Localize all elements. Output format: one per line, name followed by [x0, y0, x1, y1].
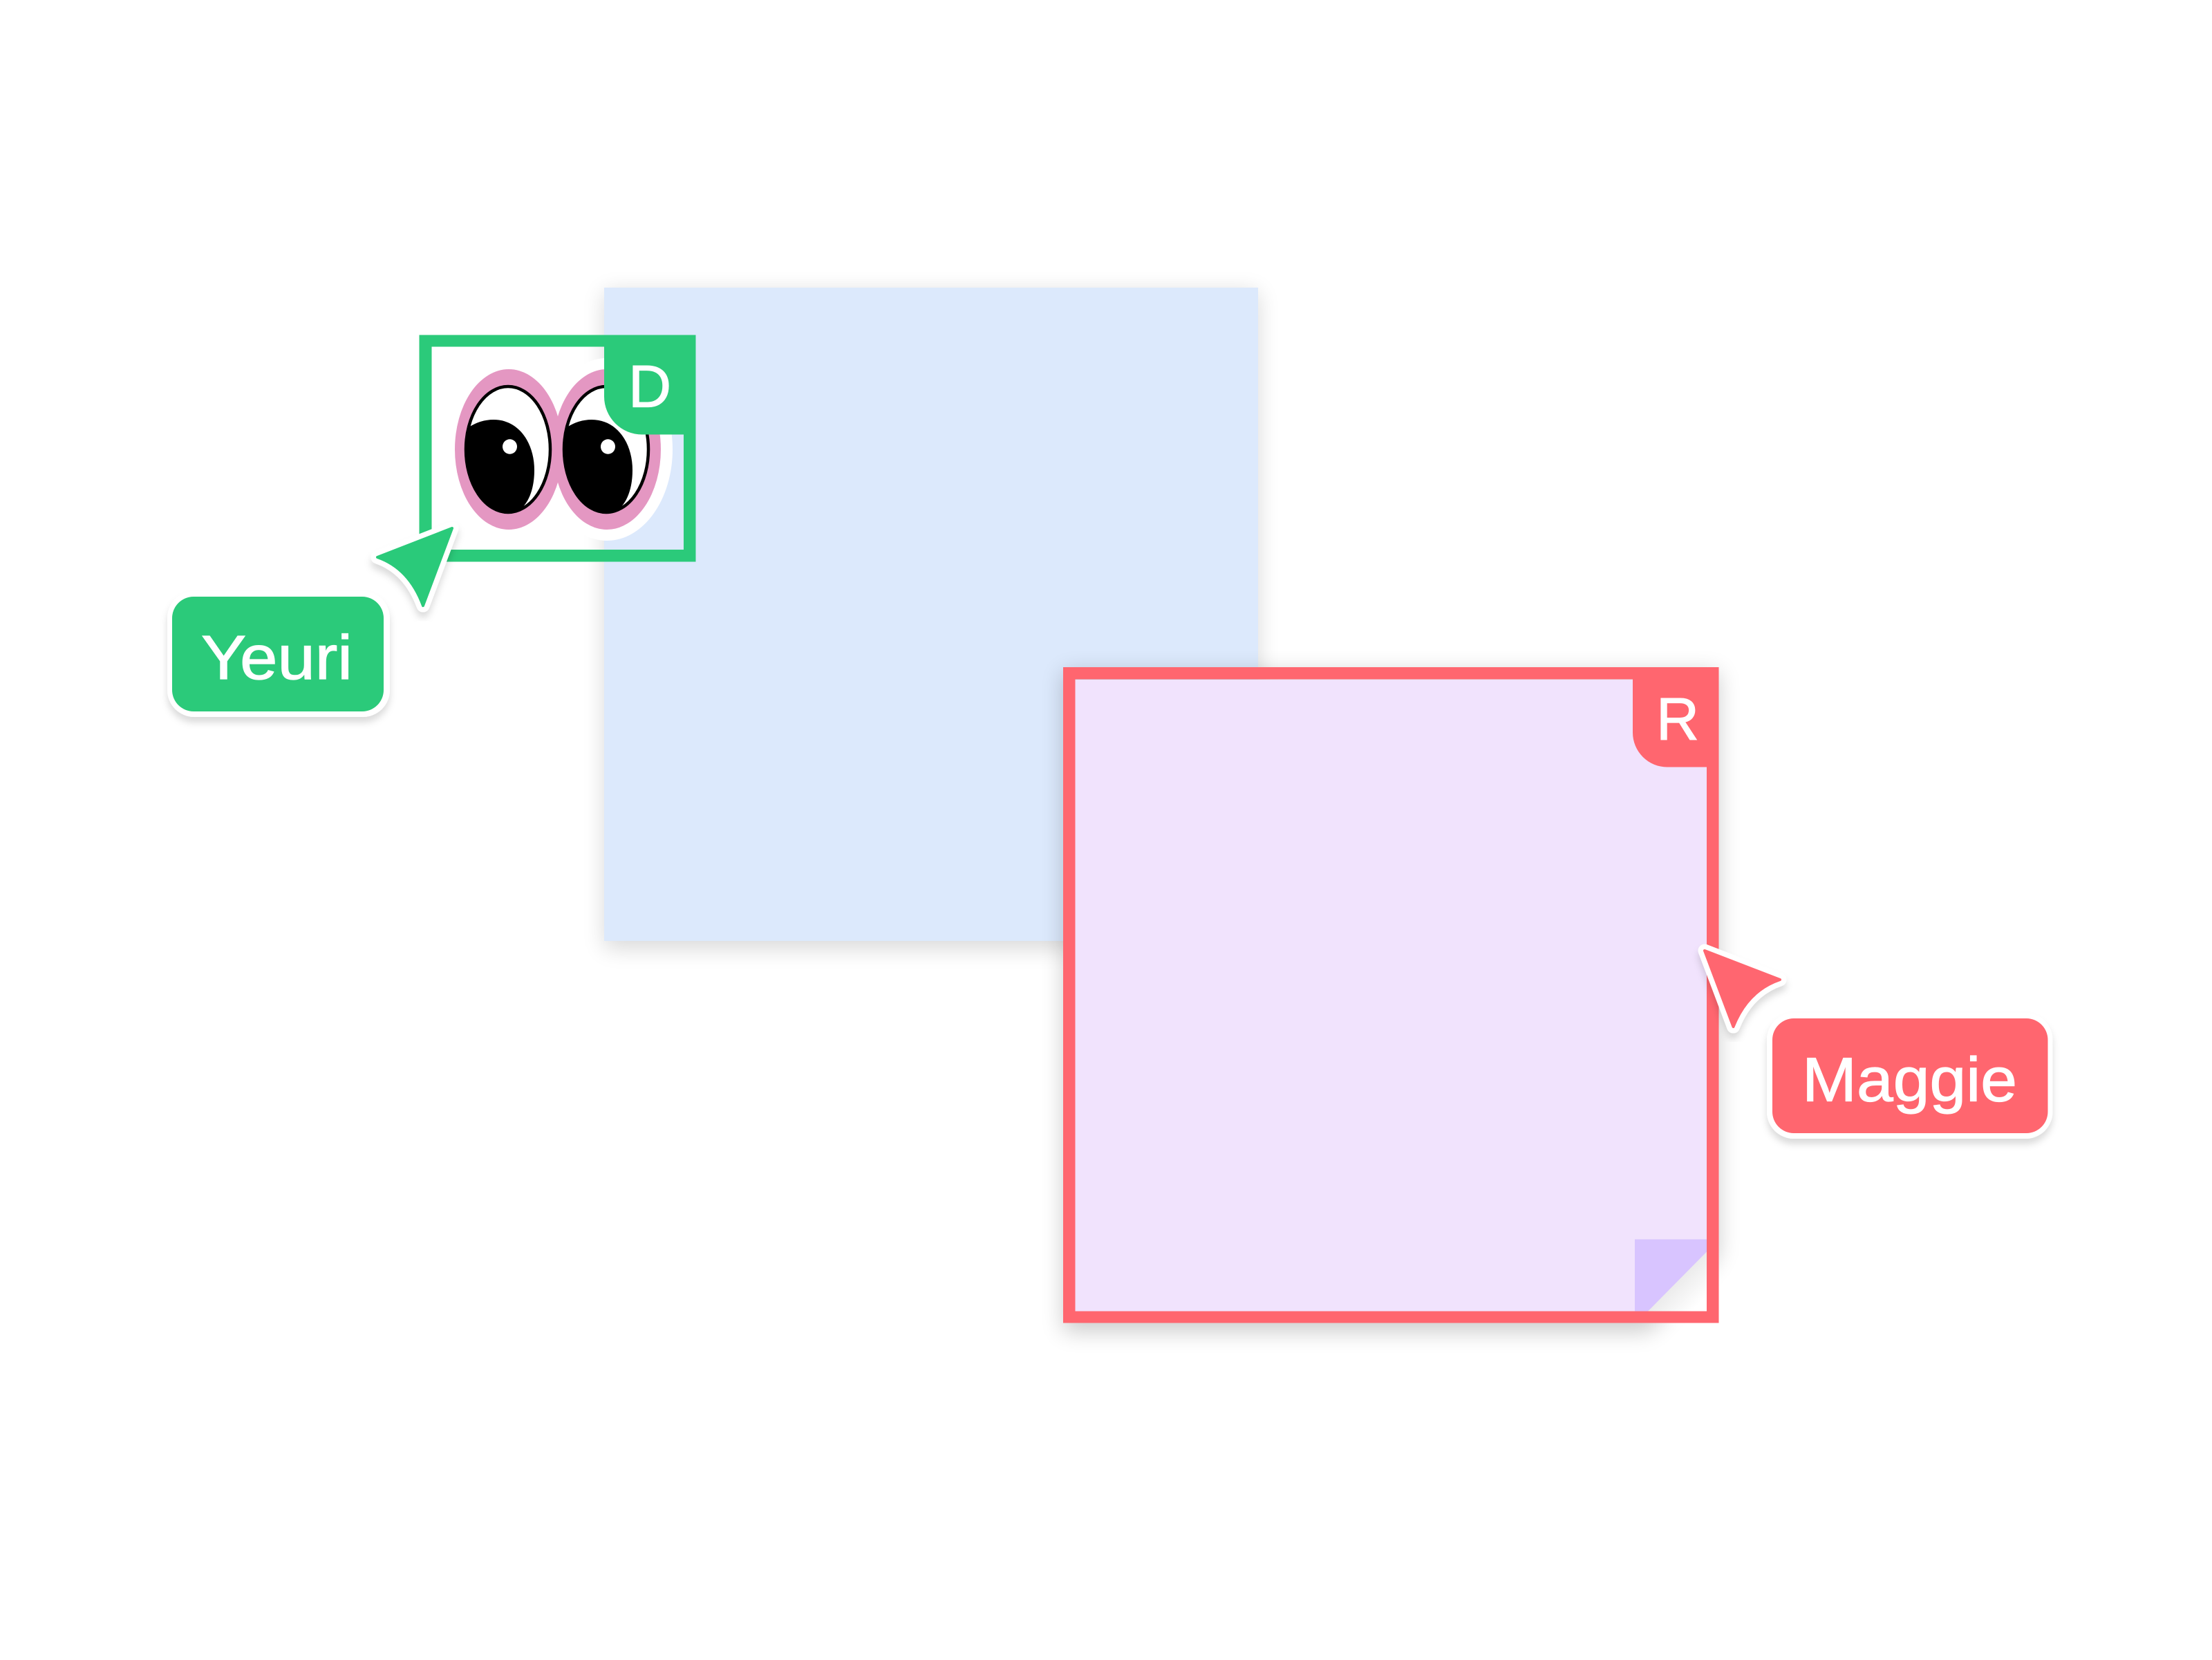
label: Maggie: Maggie	[1802, 1045, 2017, 1115]
user tab letter D: D	[628, 354, 671, 420]
panel: lilac sticky note with red selection frame	[1063, 667, 1718, 1332]
label: Yeuri	[167, 591, 390, 717]
arrow: red cursor	[1705, 951, 1780, 1027]
user tab letter R: R	[1656, 686, 1699, 752]
label: Maggie	[1767, 1013, 2053, 1139]
label: Yeuri: Yeuri	[201, 624, 353, 693]
panel: blue sticky note	[604, 288, 1258, 949]
curled corner backing	[1648, 1251, 1707, 1311]
red frame	[1063, 667, 1718, 1323]
canvas	[165, 283, 2055, 1341]
arrow: green cursor	[377, 528, 452, 606]
green selection frame with user tab	[419, 335, 695, 561]
icon: pink cartoon eyes sticker	[443, 358, 673, 541]
folded corner	[1635, 1239, 1707, 1311]
